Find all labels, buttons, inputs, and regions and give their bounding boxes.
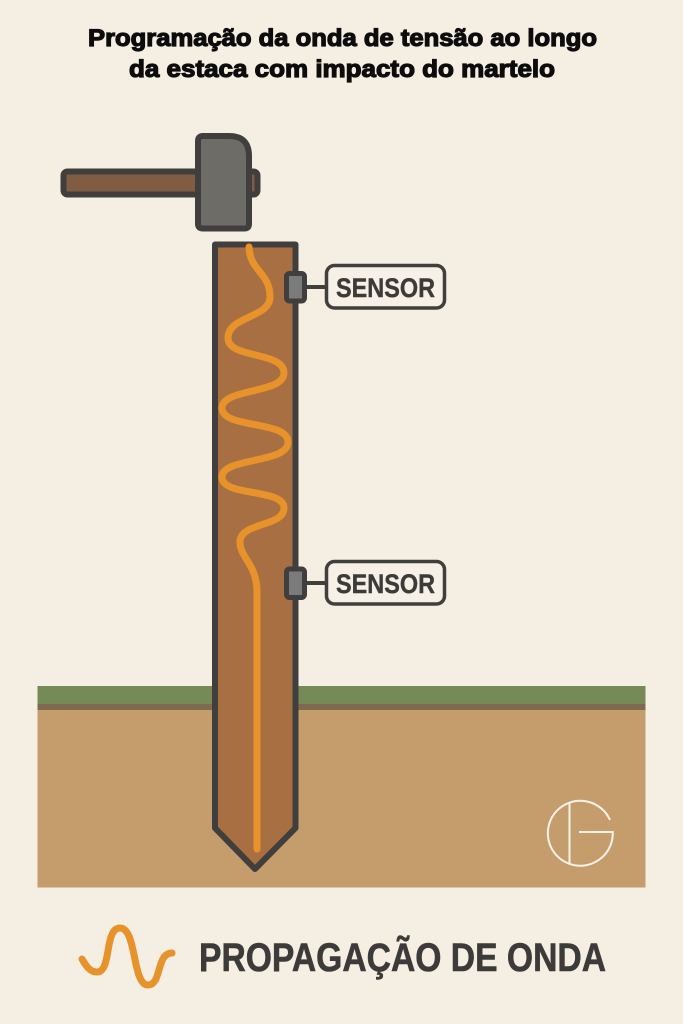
title: Programação da onda de tensão ao longo bbox=[88, 25, 597, 52]
stress wave along the pile bbox=[222, 247, 288, 849]
title: da estaca com impacto do martelo bbox=[129, 56, 555, 83]
icon: hammer bbox=[64, 136, 258, 228]
ground bbox=[38, 686, 646, 888]
sensor: upper bbox=[286, 266, 444, 308]
title bbox=[88, 25, 597, 83]
pile bbox=[215, 244, 296, 869]
icon: wave legend bbox=[82, 928, 172, 985]
sensor: lower: SENSOR bbox=[336, 569, 435, 599]
sensor: lower bbox=[286, 562, 444, 604]
icon: logo bbox=[548, 801, 613, 866]
legend label: PROPAGAÇÃO DE ONDA bbox=[199, 934, 606, 980]
sensor: upper: SENSOR bbox=[336, 273, 435, 303]
